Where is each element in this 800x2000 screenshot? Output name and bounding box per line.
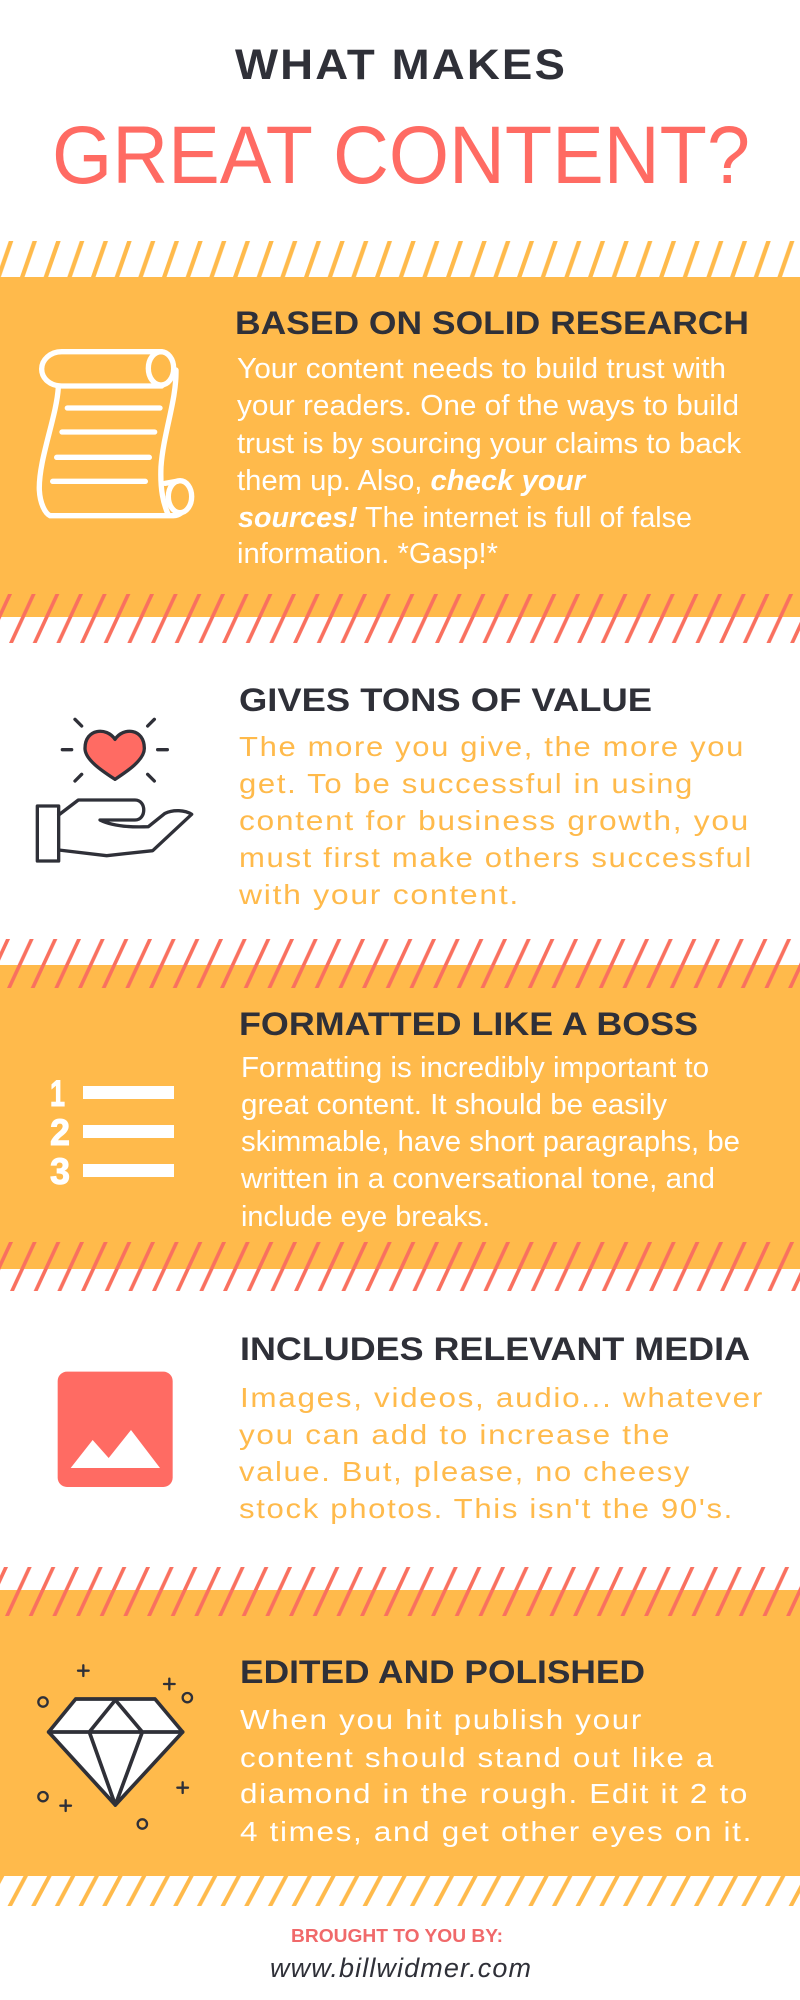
footer url: www.billwidmer.com <box>270 1953 531 1983</box>
body text: When you hit publish your <box>240 1704 643 1735</box>
body text: include eye breaks. <box>241 1201 490 1233</box>
body text: written in a conversational tone, and <box>240 1163 715 1195</box>
body text: your readers. One of the ways to build <box>237 390 739 422</box>
body text <box>240 1704 753 1847</box>
heading: INCLUDES RELEVANT MEDIA <box>240 1331 750 1367</box>
footer <box>270 1926 531 1983</box>
body text: information. *Gasp!* <box>237 538 498 570</box>
body text: stock photos. This isn't the 90's. <box>239 1493 734 1524</box>
body text: value. But, please, no cheesy <box>239 1456 691 1487</box>
body text: with your content. <box>238 879 520 910</box>
body text: get. To be successful in using <box>239 768 694 799</box>
body text: you can add to increase the <box>239 1419 671 1450</box>
panel: based on solid research <box>0 277 800 617</box>
title <box>52 41 750 201</box>
body text: Formatting is incredibly important to <box>241 1052 709 1084</box>
body text <box>237 353 742 570</box>
icon: numbered list: 1 <box>50 1073 65 1114</box>
title line: great content: GREAT CONTENT? <box>52 110 750 201</box>
stripes: red divider 4 <box>0 1567 800 1616</box>
body text: sources! The internet is full of false <box>238 502 692 534</box>
body text: diamond in the rough. Edit it 2 to <box>240 1778 749 1809</box>
body text <box>239 1382 764 1524</box>
body text: content should stand out like a <box>240 1742 715 1773</box>
icon: numbered list: 2 <box>50 1112 70 1153</box>
icon: image <box>58 1372 173 1487</box>
body text: skimmable, have short paragraphs, be <box>241 1126 740 1158</box>
body text: Your content needs to build trust with <box>237 353 726 385</box>
icon: numbered list <box>50 1073 174 1192</box>
body text <box>240 1052 740 1233</box>
panel: includes relevant media <box>58 1331 764 1524</box>
stripes: red divider 3 <box>0 1242 800 1291</box>
body text: content for business growth, you <box>239 805 750 836</box>
stripes: red divider 1 <box>0 594 800 643</box>
stripes: red divider 2 <box>0 939 800 988</box>
icon: scroll <box>39 352 192 516</box>
body text: them up. Also, check your <box>237 465 587 497</box>
panel: gives tons of value <box>37 682 753 910</box>
body text: trust is by sourcing your claims to back <box>237 428 742 460</box>
body text: 4 times, and get other eyes on it. <box>240 1816 753 1847</box>
panel: formatted like a boss <box>0 965 800 1269</box>
body text <box>238 731 753 910</box>
heading: FORMATTED LIKE A BOSS <box>239 1006 698 1042</box>
body text: must first make others successful <box>239 842 753 873</box>
stripes: yellow top band <box>0 241 800 277</box>
icon: numbered list: 3 <box>50 1151 70 1192</box>
heading: EDITED AND POLISHED <box>240 1654 645 1690</box>
icon: diamond <box>38 1665 192 1829</box>
title line: what makes: WHAT MAKES <box>235 41 567 89</box>
body text: The more you give, the more you <box>239 731 745 762</box>
footer label: BROUGHT TO YOU BY: <box>291 1926 503 1946</box>
heading: GIVES TONS OF VALUE <box>239 682 652 718</box>
body text: Images, videos, audio... whatever <box>240 1382 764 1413</box>
icon: hand holding heart <box>37 719 192 861</box>
stripes: yellow bottom band <box>0 1876 800 1906</box>
heading: BASED ON SOLID RESEARCH <box>235 305 749 341</box>
body text: great content. It should be easily <box>241 1089 668 1121</box>
panel: edited and polished <box>0 1590 800 1876</box>
